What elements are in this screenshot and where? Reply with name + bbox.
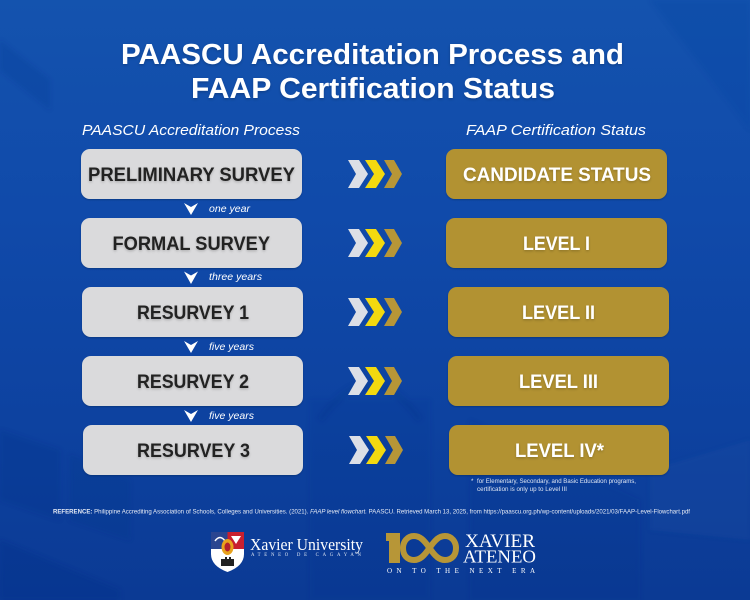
step: Resurvey 3 bbox=[83, 425, 303, 475]
status: Level III bbox=[448, 356, 669, 406]
arrow: three years bbox=[184, 271, 263, 284]
arrow: one year: one year bbox=[209, 203, 250, 215]
status: Level I: LEVEL I bbox=[523, 233, 590, 255]
title: FAAP Certification Status bbox=[191, 73, 555, 105]
step: Resurvey 1: RESURVEY 1 bbox=[137, 302, 249, 324]
status: Level II: LEVEL II bbox=[522, 302, 595, 324]
logo: Xavier University shield bbox=[211, 532, 244, 572]
status: Level I bbox=[446, 218, 667, 268]
footnote bbox=[471, 478, 636, 493]
status: Candidate Status: CANDIDATE STATUS bbox=[463, 164, 651, 186]
column heading: PAASCU Accreditation Process: PAASCU Accreditation Process bbox=[82, 122, 301, 139]
arrow: five years bbox=[184, 410, 255, 422]
chevrons: row 1 bbox=[348, 160, 402, 188]
arrow: one year bbox=[184, 203, 250, 215]
chevrons: row 3 bbox=[348, 298, 402, 326]
chevrons: row 4 bbox=[348, 367, 402, 395]
logo: 100 Xavier Ateneo: ON TO THE NEXT ERA bbox=[387, 567, 535, 575]
column heading: FAAP Certification Status: FAAP Certification Status bbox=[466, 122, 647, 139]
title bbox=[121, 39, 624, 105]
footnote: for Elementary, Secondary, and Basic Education programs, bbox=[477, 478, 636, 485]
title: PAASCU Accreditation Process and bbox=[121, 39, 624, 71]
step: Resurvey 3: RESURVEY 3 bbox=[137, 440, 250, 462]
footnote: certification is only up to Level III bbox=[477, 486, 567, 493]
arrow: five years: five years bbox=[209, 341, 255, 353]
logo text: Xavier University: Xavier University bbox=[250, 535, 364, 554]
arrow: three years: three years bbox=[209, 271, 263, 283]
step: Formal Survey: FORMAL SURVEY bbox=[112, 233, 270, 255]
status: Candidate Status bbox=[446, 149, 667, 199]
step: Resurvey 2: RESURVEY 2 bbox=[137, 371, 249, 393]
reference citation: REFERENCE: Philippine Accrediting Association of Schools, Colleges and Universities. (2021). FAAP level flowchart. PAASCU. Retrieved March 13, 2025, from https://paascu.org.ph/wp-content/uploads/2021/03/FAAP-Level-Flowchart.pdf bbox=[53, 508, 690, 516]
step: Formal Survey bbox=[81, 218, 302, 268]
status: Level II bbox=[448, 287, 669, 337]
arrow: five years: five years bbox=[209, 410, 255, 422]
status: Level IV* bbox=[449, 425, 669, 475]
step: Resurvey 1 bbox=[82, 287, 303, 337]
chevrons: row 2 bbox=[348, 229, 402, 257]
chevrons: row 5 bbox=[349, 436, 403, 464]
status: Level III: LEVEL III bbox=[519, 371, 598, 393]
step: Resurvey 2 bbox=[82, 356, 303, 406]
step: Preliminary Survey: PRELIMINARY SURVEY bbox=[88, 164, 295, 186]
logo: 100 Xavier Ateneo: ATENEO bbox=[463, 546, 536, 566]
arrow: five years bbox=[184, 341, 255, 353]
logo: 100 Xavier Ateneo bbox=[386, 531, 536, 575]
footnote: * bbox=[471, 478, 474, 485]
logo text: Xavier University: ATENEO DE CAGAYAN bbox=[251, 553, 362, 558]
step: Preliminary Survey bbox=[81, 149, 302, 199]
status: Level IV*: LEVEL IV* bbox=[515, 440, 604, 462]
logo: 100 Xavier Ateneo: XAVIER bbox=[465, 531, 535, 552]
